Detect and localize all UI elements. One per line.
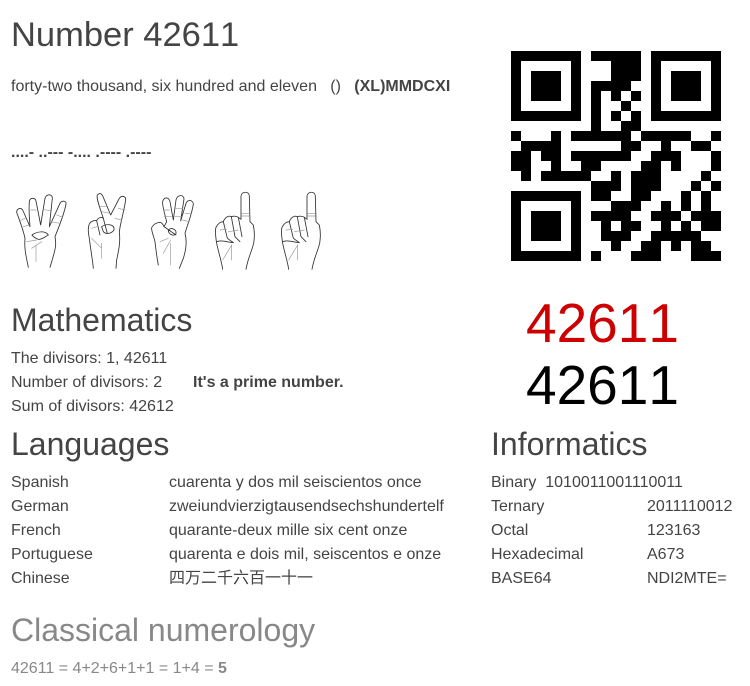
numerology sum: 42611 = 4+2+6+1+1 = 1+4 = 5: [11, 660, 227, 677]
informatics table: BASE64: [491, 570, 551, 587]
informatics table: Ternary: [491, 498, 544, 515]
divisors text block: Sum of divisors: 42612: [11, 398, 174, 415]
languages table: quarante-deux mille six cent onze: [169, 522, 407, 539]
divisors text block: The divisors: 1, 42611: [11, 350, 167, 367]
divisors text block: It's a prime number.: [193, 374, 344, 391]
divisors text block: [11, 350, 344, 415]
black number: 42611: [526, 354, 679, 416]
informatics table: 2011110012: [647, 498, 732, 515]
informatics table: 123163: [647, 522, 700, 539]
title: Number 42611: [11, 16, 239, 54]
sign language hands: [16, 192, 321, 270]
informatics table: Hexadecimal: [491, 546, 583, 563]
languages table: Spanish: [11, 474, 69, 491]
informatics table: Octal: [491, 522, 528, 539]
number in words and roman numeral: forty-two thousand, six hundred and eleven () (XL)MMDCXI: [11, 78, 450, 95]
languages table: Chinese: [11, 570, 70, 587]
QR code: [511, 51, 721, 261]
heading: classical numerology: Classical numerology: [11, 612, 315, 648]
morse code: ....- ..--- -.... .---- .----: [11, 144, 151, 161]
languages table: cuarenta y dos mil seiscientos once: [169, 474, 422, 491]
informatics table: [491, 474, 732, 587]
languages table: zweiundvierzigtausendsechshundertelf: [169, 498, 444, 515]
languages table: French: [11, 522, 61, 539]
languages table: [11, 474, 444, 587]
red number: 42611: [526, 292, 679, 354]
heading: mathematics: Mathematics: [11, 302, 192, 338]
languages table: German: [11, 498, 69, 515]
languages table: quarenta e dois mil, seiscentos e onze: [169, 546, 441, 563]
heading: informatics: Informatics: [491, 426, 647, 462]
languages table: 四万二千六百一十一: [169, 570, 313, 587]
informatics table: Binary 1010011001110011: [491, 474, 683, 491]
languages table: Portuguese: [11, 546, 93, 563]
divisors text block: Number of divisors: 2: [11, 374, 162, 391]
informatics table: A673: [647, 546, 684, 563]
informatics table: NDI2MTE=: [647, 570, 727, 587]
heading: languages: Languages: [11, 426, 169, 462]
